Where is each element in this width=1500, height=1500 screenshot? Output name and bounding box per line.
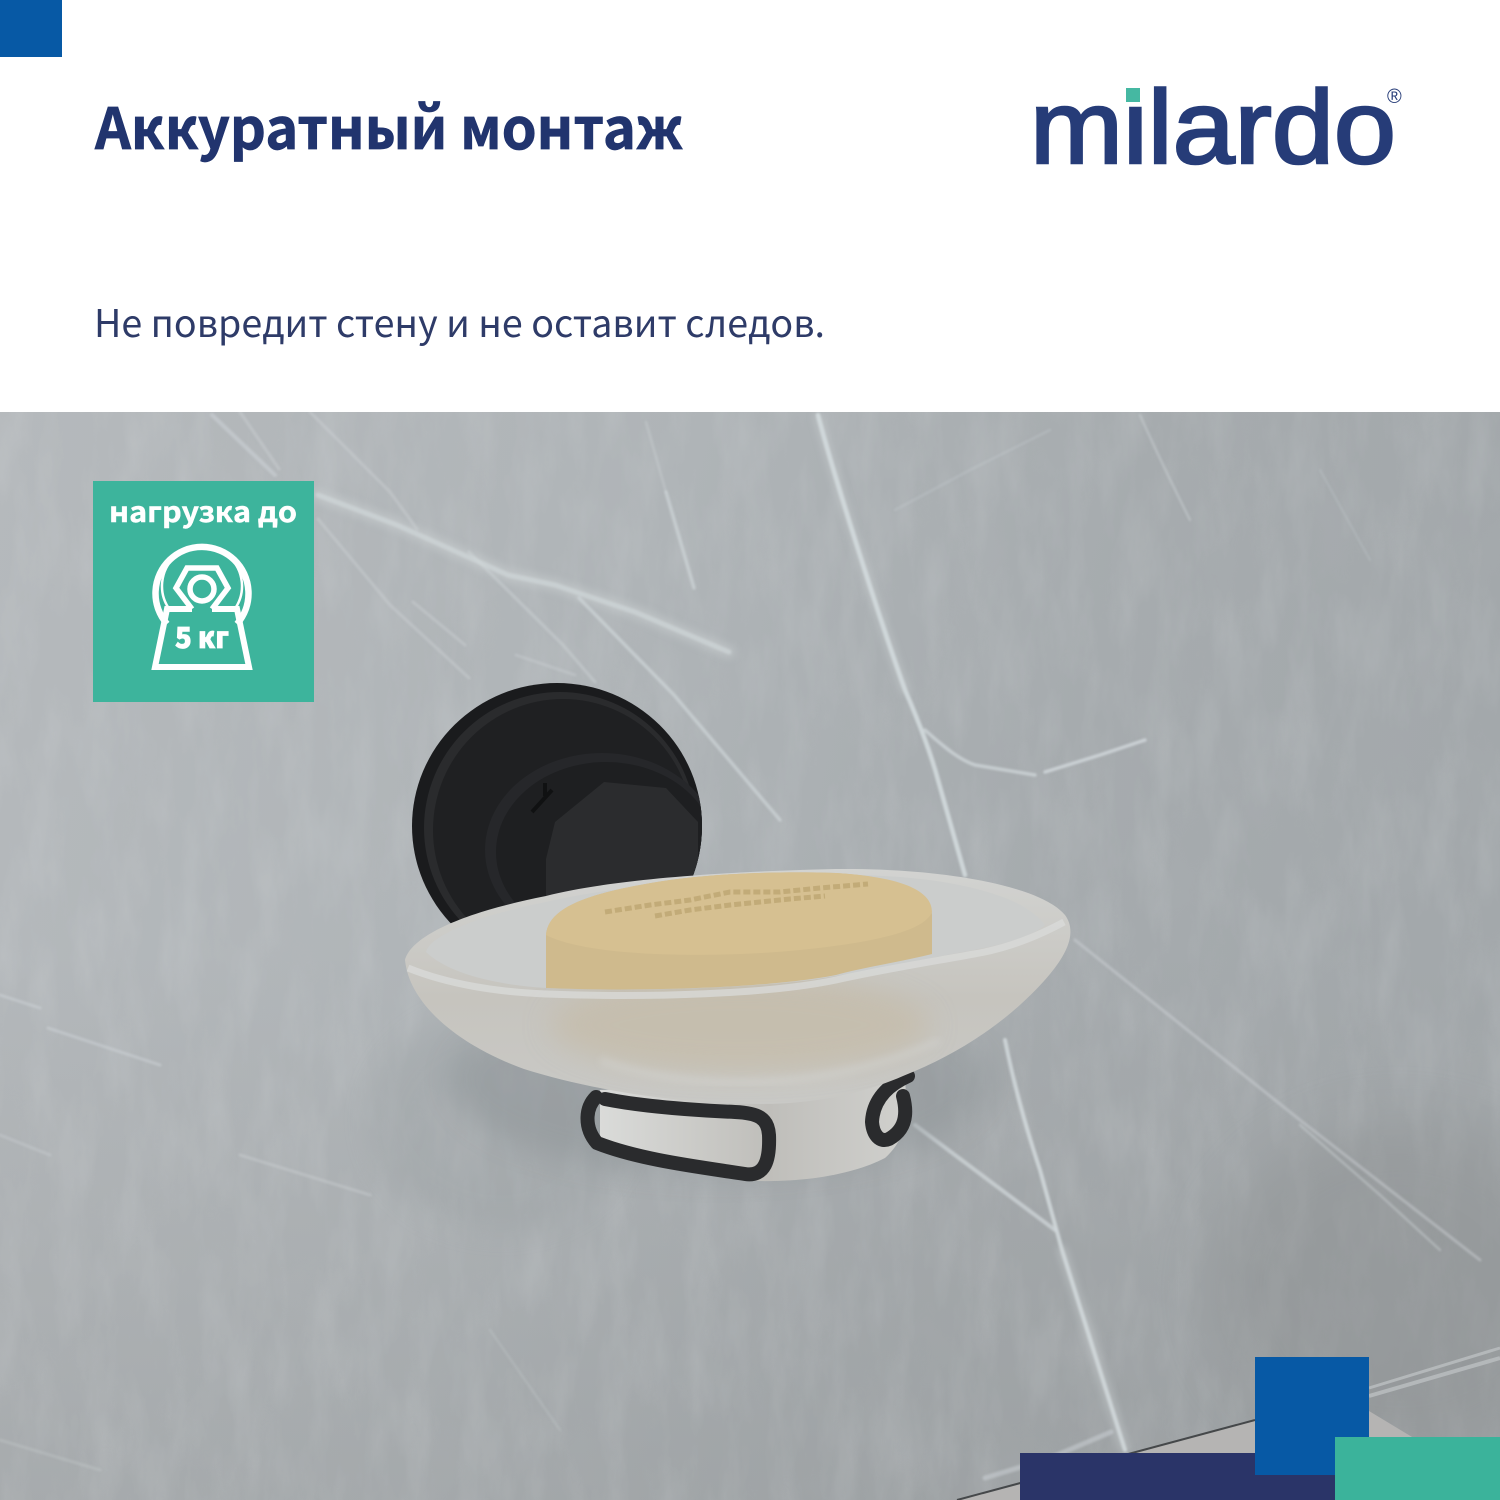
badge: load up to 5 kg [93, 481, 314, 702]
soap bar [546, 872, 932, 989]
badge label: нагрузка до [109, 491, 297, 531]
logo: milardo: milardo [1030, 70, 1396, 186]
corner accent: teal block [1335, 1437, 1500, 1500]
logo: milardo: ® [1387, 86, 1402, 108]
hex knob [546, 782, 698, 896]
dish bowl [405, 869, 1070, 1104]
bottom-right shelf [957, 1348, 1500, 1500]
wire holder [588, 1076, 908, 1174]
corner accent: top-left blue square [0, 0, 62, 57]
weight value: 5 кг [175, 615, 229, 657]
corner accent: blue block [1255, 1357, 1369, 1475]
foot of dish [600, 1078, 906, 1181]
title: Аккуратный монтаж [94, 84, 683, 166]
subtitle: Не повредит стену и не оставит следов. [94, 293, 825, 348]
embossed soap text [605, 884, 868, 916]
dish interior [426, 875, 1045, 990]
icon: weight with nut [155, 546, 249, 667]
wall suction plate [412, 683, 702, 924]
marble veins [0, 412, 1480, 1478]
marble wall photo [0, 412, 1500, 1500]
soft glow around veins [318, 415, 1125, 1450]
soap dish product [405, 683, 1070, 1181]
corner accent: navy block [1020, 1453, 1335, 1500]
dish front lip highlight [408, 922, 1064, 995]
